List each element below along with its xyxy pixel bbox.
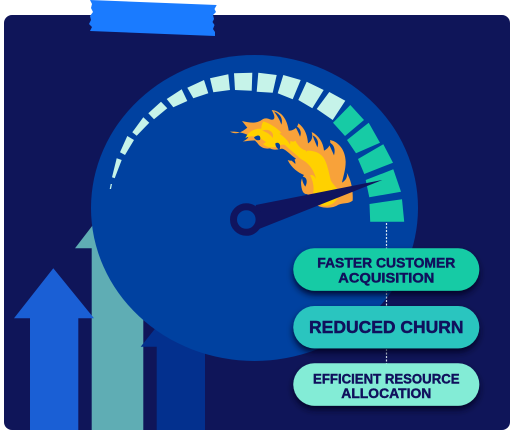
gauge needle <box>234 180 382 232</box>
pill: efficient resource allocation: ALLOCATION <box>341 385 431 401</box>
blue tape <box>89 0 217 36</box>
flame yellow core <box>245 121 339 206</box>
pill: faster customer acquisition: FASTER CUSTOMER <box>317 255 455 271</box>
pill: efficient resource allocation <box>293 363 479 406</box>
arrow: bright blue <box>14 268 94 431</box>
flame blue curls <box>254 111 335 187</box>
gauge dial <box>91 55 418 361</box>
flame outer <box>230 110 353 208</box>
pill: efficient resource allocation: EFFICIENT RESOURCE <box>313 370 460 386</box>
pill: reduced churn: REDUCED CHURN <box>309 317 464 337</box>
pill: faster customer acquisition <box>293 248 479 291</box>
needle hub <box>234 207 259 232</box>
gauge ticks: green segments <box>333 105 404 222</box>
arrow: dark blue <box>140 329 205 430</box>
flame orange licks <box>253 130 337 185</box>
needle pointer <box>256 180 382 229</box>
pill: reduced churn <box>293 306 479 348</box>
gauge ticks: pale segments <box>110 73 345 189</box>
pill: faster customer acquisition: ACQUISITION <box>338 270 434 286</box>
rising arrows <box>14 226 205 430</box>
arrow: teal <box>75 226 144 430</box>
dashed connector <box>386 223 388 364</box>
icon: flame <box>230 110 353 208</box>
